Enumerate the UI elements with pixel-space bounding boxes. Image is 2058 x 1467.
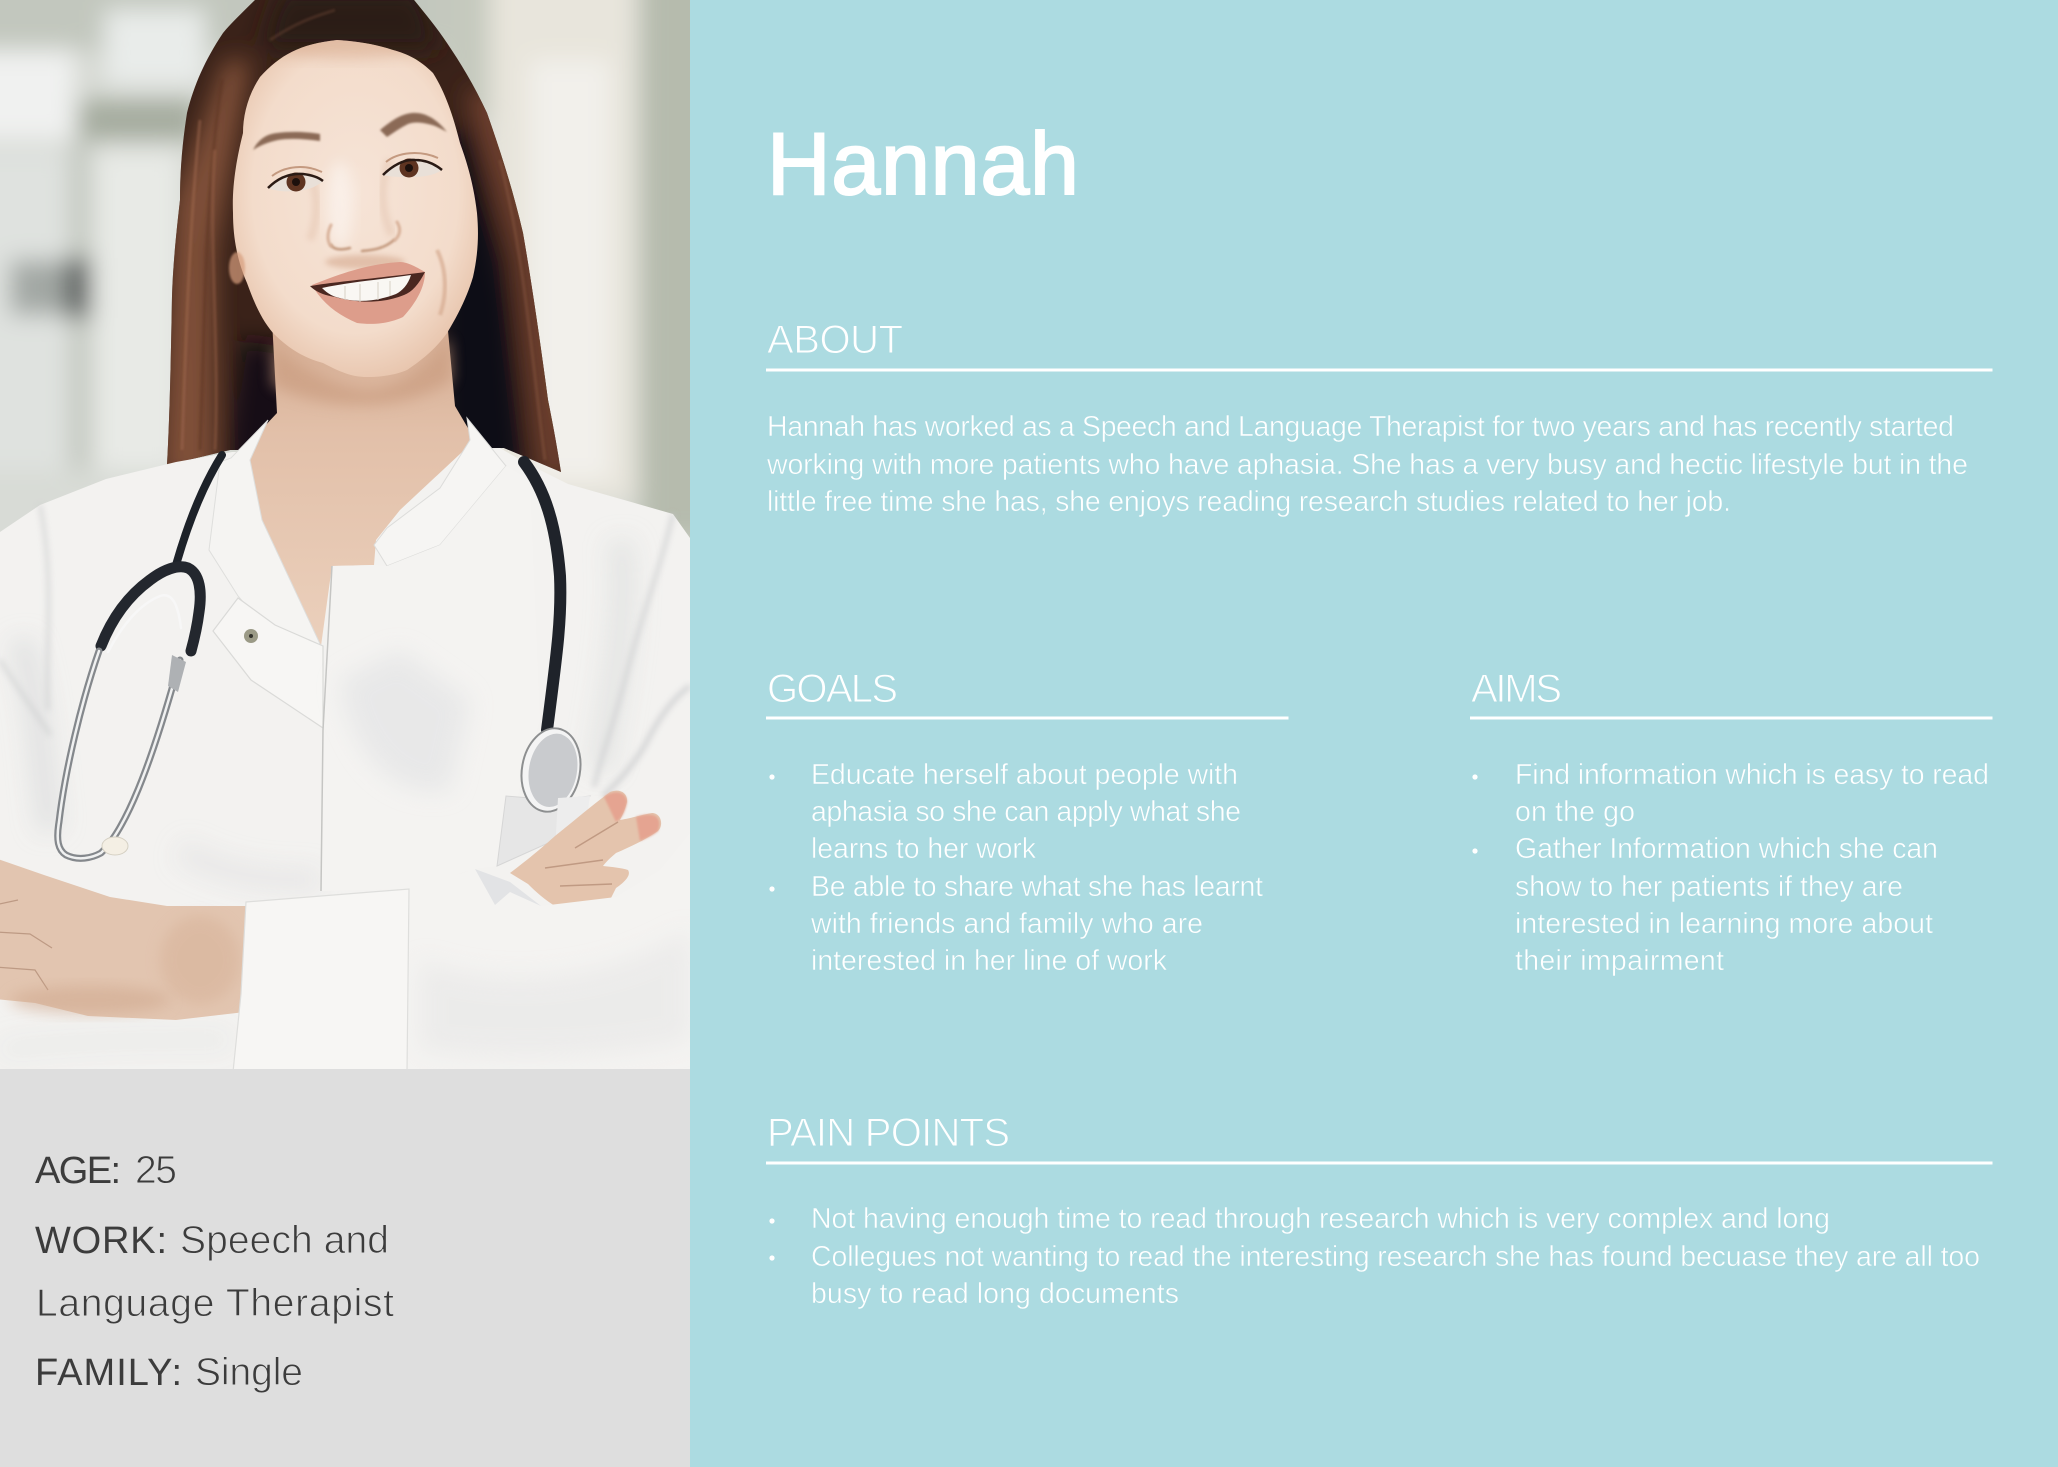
placket shadow [349, 660, 461, 785]
pain points section [766, 1111, 1992, 1310]
eyebrows [253, 113, 447, 150]
goals list: aphasia so she can apply what she [811, 796, 1241, 828]
right collar [374, 418, 506, 566]
goals list: Be able to share what she has learnt [811, 871, 1263, 903]
about section [766, 318, 1992, 518]
stethoscope chest piece [520, 727, 582, 813]
goals list: with friends and family who are [810, 908, 1203, 940]
coat shading folds [0, 506, 690, 827]
work [35, 1219, 394, 1325]
photo background: blurred windows [0, 0, 690, 538]
goals list [769, 759, 1263, 977]
aims list [1472, 759, 1989, 977]
work: Speech and [180, 1219, 389, 1262]
demographics panel [0, 1070, 690, 1467]
pain points list: Not having enough time to read through research which is very complex and long [811, 1203, 1830, 1235]
aims list: show to her patients if they are [1515, 871, 1903, 903]
stethoscope ear tip [102, 837, 128, 855]
stethoscope yoke clip [168, 655, 186, 692]
right eye [383, 153, 442, 178]
aims section [1470, 667, 1992, 977]
work: WORK: [35, 1220, 167, 1262]
pain points list: Collegues not wanting to read the interesting research she has found becuase they are all too [811, 1241, 1980, 1273]
about text: Hannah has worked as a Speech and Language Therapist for two years and has recently started [767, 411, 1954, 443]
photo: smiling doctor in white coat with stethoscope [0, 0, 730, 1075]
about text: working with more patients who have aphasia. She has a very busy and hectic lifestyle but in the [766, 449, 1968, 481]
white coat body [0, 448, 695, 1075]
family [35, 1351, 303, 1394]
mouth with teeth and lips [310, 262, 425, 324]
aims list: on the go [1515, 796, 1635, 828]
age: AGE: [35, 1150, 121, 1192]
stethoscope tubes [58, 455, 560, 858]
face shading [250, 26, 445, 315]
aims list: Gather Information which she can [1515, 833, 1938, 865]
pain points heading: PAIN POINTS [767, 1111, 1010, 1155]
age: 25 [135, 1149, 177, 1192]
age [35, 1149, 177, 1192]
about text: little free time she has, she enjoys reading research studies related to her job. [767, 486, 1731, 518]
left lapel flap with button [213, 598, 323, 728]
left ear hint [229, 252, 245, 284]
title: Hannah [767, 114, 1079, 213]
aims list: Find information which is easy to read [1515, 759, 1989, 791]
shirt cuff [233, 889, 409, 1072]
nose [328, 222, 400, 251]
about text [766, 411, 1968, 518]
face [233, 40, 478, 377]
goals section [766, 667, 1288, 977]
goals list: learns to her work [811, 833, 1037, 865]
placket edge [321, 566, 332, 891]
family: Single [195, 1351, 303, 1394]
pocket front [557, 796, 590, 830]
hair [150, 0, 580, 480]
neck shadow [272, 338, 452, 405]
right sleeve [462, 872, 612, 985]
work: Language Therapist [36, 1282, 394, 1325]
coat pocket [497, 796, 590, 866]
aims heading: AIMS [1471, 667, 1562, 711]
sleeve folds [448, 869, 662, 1028]
neck and chest skin [250, 331, 470, 644]
left eye [268, 167, 323, 192]
aims list: their impairment [1515, 945, 1724, 977]
family: FAMILY: [35, 1352, 182, 1394]
goals list: Educate herself about people with [811, 759, 1238, 791]
left collar [209, 420, 321, 646]
about heading: ABOUT [767, 318, 903, 362]
front placket [336, 466, 506, 872]
right hand fingers [510, 791, 661, 906]
goals list: interested in her line of work [811, 945, 1168, 977]
pain points list: busy to read long documents [811, 1278, 1179, 1310]
goals heading: GOALS [767, 667, 898, 711]
aims list: interested in learning more about [1515, 908, 1933, 940]
left hand and forearm [0, 858, 250, 1020]
grey rule under photo [0, 1069, 690, 1071]
pain points list [769, 1203, 1980, 1310]
